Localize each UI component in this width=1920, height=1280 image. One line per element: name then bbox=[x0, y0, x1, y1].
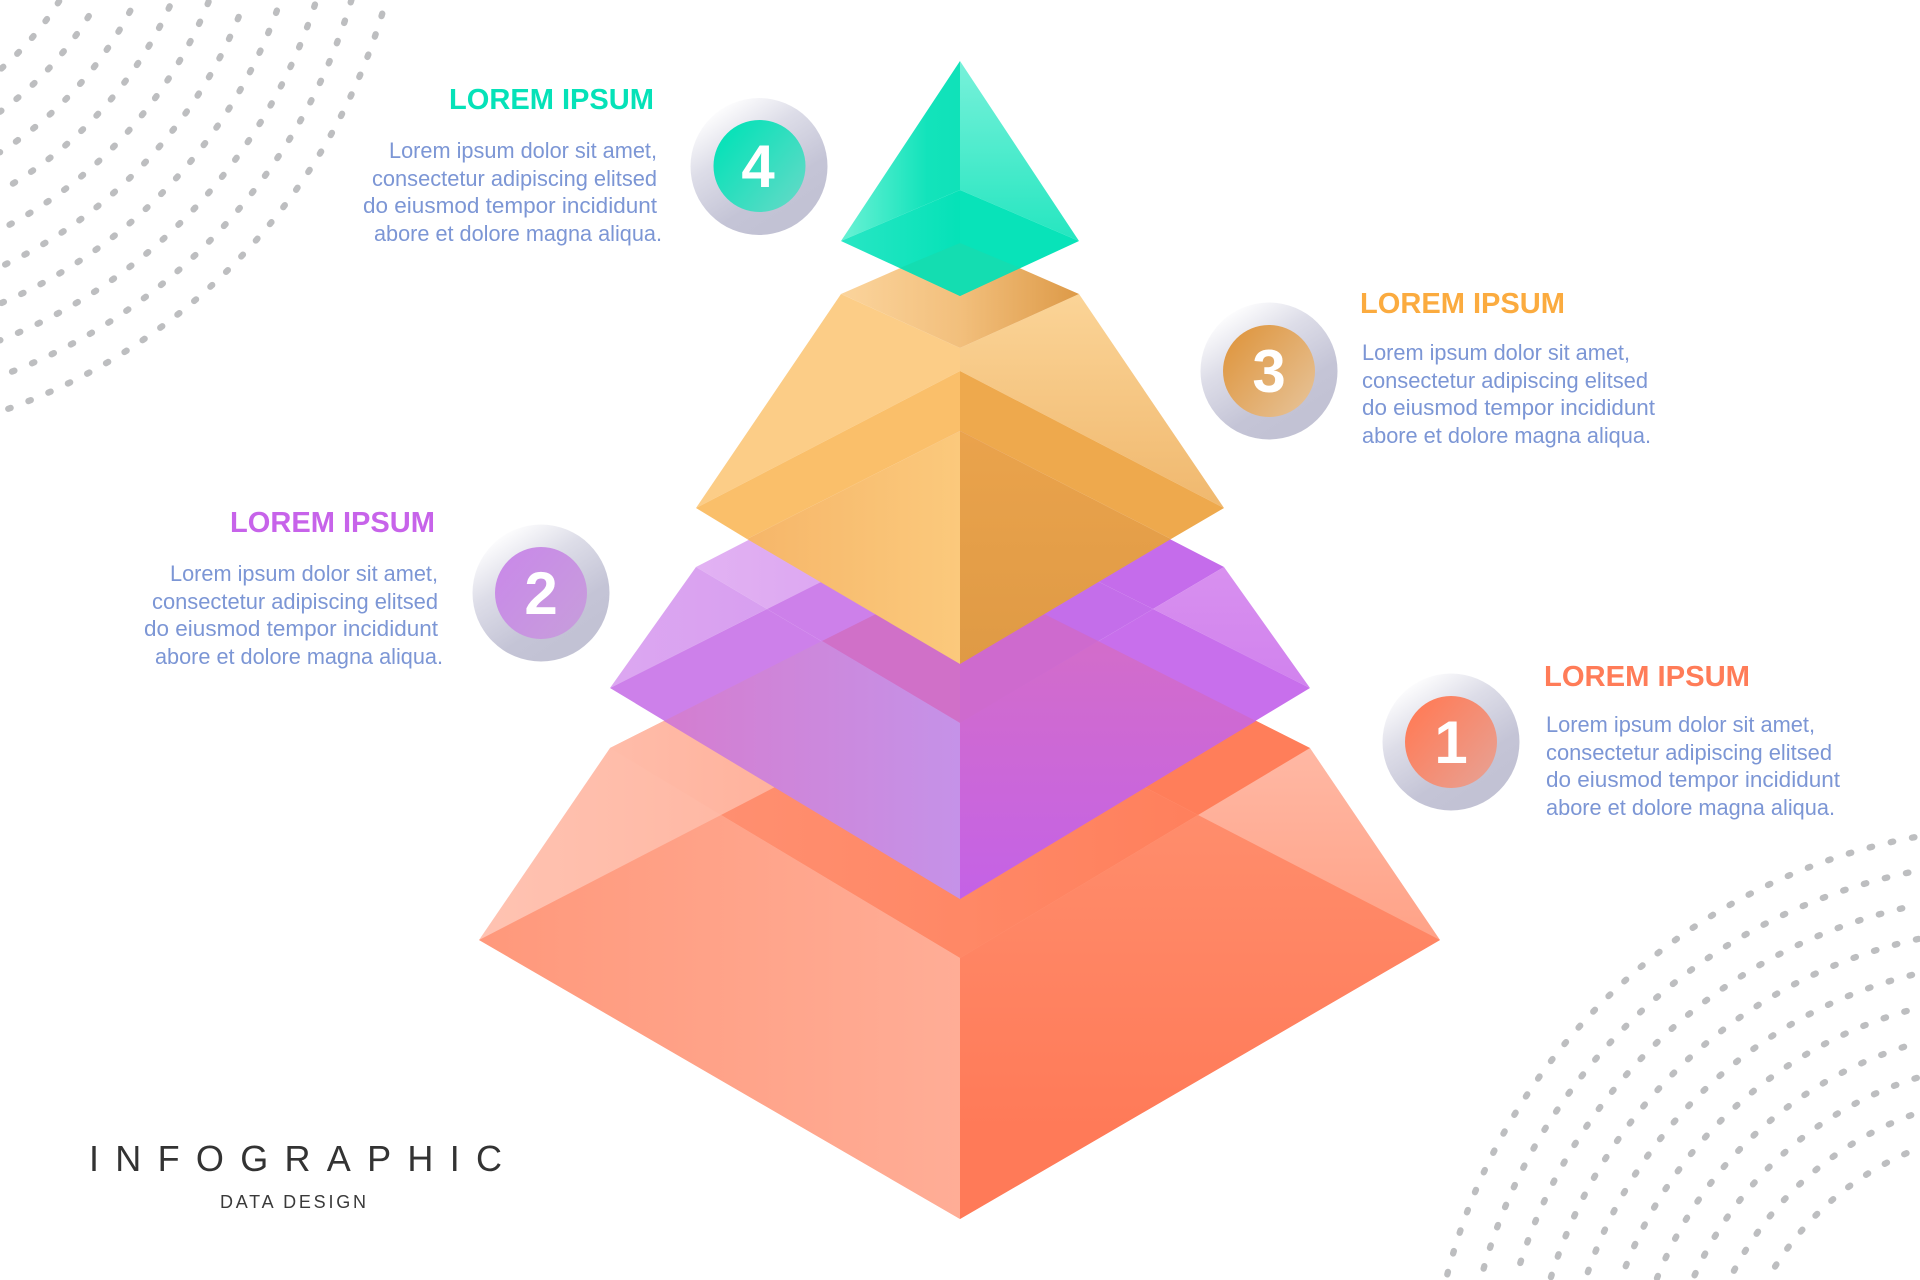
text block 3 bbox=[1360, 288, 1655, 448]
text block 3: do eiusmod tempor incididunt bbox=[1362, 395, 1655, 420]
text block 3: LOREM IPSUM bbox=[1360, 288, 1565, 320]
text block 3: Lorem ipsum dolor sit amet, bbox=[1362, 340, 1630, 365]
text block 3: consectetur adipiscing elitsed bbox=[1362, 368, 1648, 393]
badge 3: 3 bbox=[1252, 338, 1286, 405]
badge 3 bbox=[1200, 302, 1338, 440]
subtitle: DATA DESIGN bbox=[220, 1192, 366, 1212]
badge 1 bbox=[1382, 674, 1520, 810]
text block 2: abore et dolore magna aliqua. bbox=[155, 644, 443, 669]
badge 2: 2 bbox=[524, 560, 558, 627]
pyramid tier 1: coral bbox=[479, 572, 1440, 1219]
background dot arcs: top left bbox=[0, 0, 386, 412]
text block 4: do eiusmod tempor incididunt bbox=[363, 193, 657, 218]
text block 1: LOREM IPSUM bbox=[1544, 661, 1750, 693]
text block 4: abore et dolore magna aliqua. bbox=[374, 221, 662, 246]
text block 2 bbox=[144, 507, 443, 669]
text block 3: abore et dolore magna aliqua. bbox=[1362, 423, 1651, 448]
text block 1 bbox=[1544, 661, 1840, 820]
pyramid chart bbox=[479, 61, 1440, 1219]
title: INFOGRAPHIC bbox=[89, 1138, 502, 1179]
pyramid tier 3: orange bbox=[696, 242, 1224, 664]
text block 2: do eiusmod tempor incididunt bbox=[144, 616, 438, 641]
badge 1: 1 bbox=[1434, 709, 1468, 776]
text block 4: LOREM IPSUM bbox=[449, 84, 654, 116]
pyramid tier 4: green bbox=[841, 61, 1079, 296]
text block 1: Lorem ipsum dolor sit amet, bbox=[1546, 712, 1815, 737]
badge 4: 4 bbox=[741, 133, 775, 200]
text block 4: consectetur adipiscing elitsed bbox=[372, 166, 657, 191]
text block 4 bbox=[363, 84, 662, 246]
text block 2: LOREM IPSUM bbox=[230, 507, 435, 539]
text block 1: abore et dolore magna aliqua. bbox=[1546, 795, 1835, 820]
text block 1: consectetur adipiscing elitsed bbox=[1546, 740, 1832, 765]
text block 4: Lorem ipsum dolor sit amet, bbox=[389, 138, 657, 163]
badge 2 bbox=[472, 524, 610, 662]
badge 4 bbox=[690, 98, 828, 235]
text block 2: Lorem ipsum dolor sit amet, bbox=[170, 561, 438, 586]
text block 2: consectetur adipiscing elitsed bbox=[152, 589, 438, 614]
text block 1: do eiusmod tempor incididunt bbox=[1546, 767, 1840, 792]
pyramid tier 2: purple bbox=[610, 431, 1310, 899]
background dot arcs: bottom right bbox=[1446, 836, 1920, 1280]
